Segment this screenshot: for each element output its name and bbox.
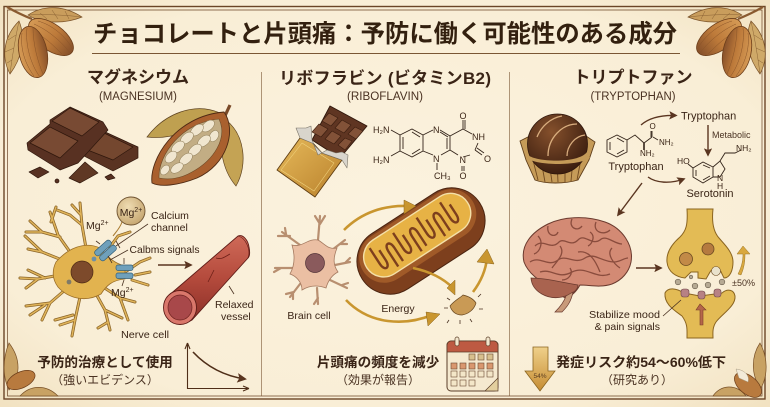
callout line: stabilize bbox=[663, 300, 681, 316]
icon: Mg2+ ion bbox=[113, 197, 145, 236]
label: stabilize: Stabilize mood bbox=[589, 309, 660, 321]
label: brain cell: Brain cell bbox=[287, 310, 331, 322]
chemical structure: riboflavin: H₂N bbox=[373, 155, 390, 165]
text: frequency reduction: 片頭痛の頻度を減少 bbox=[317, 354, 440, 370]
chemical structure: riboflavin: N bbox=[433, 154, 440, 164]
icon: chocolate pieces bbox=[27, 107, 138, 183]
text: preventive use bbox=[37, 354, 173, 387]
panel: magnesium bbox=[20, 67, 254, 391]
icon: down arrow 54%: 54% bbox=[533, 373, 547, 380]
icon: cocoa pod bbox=[147, 105, 243, 186]
chemical structure: riboflavin bbox=[373, 111, 491, 181]
divider lines bbox=[92, 54, 680, 396]
icon: down arrow 54% bbox=[525, 347, 555, 391]
chart: declining curve bbox=[185, 343, 249, 391]
chemical structure: tryptophan bbox=[607, 122, 674, 158]
chemical structure: serotonin bbox=[677, 143, 752, 191]
text: preventive use: （強いエビデンス） bbox=[51, 372, 159, 387]
icon: brain bbox=[523, 218, 631, 312]
text: risk reduction bbox=[556, 354, 726, 387]
heading: magnesium: マグネシウム bbox=[87, 67, 189, 87]
panel: riboflavin bbox=[274, 68, 498, 391]
icon: Mg2+ ion: 2+ bbox=[134, 207, 142, 214]
icon: nerve cell bbox=[20, 203, 150, 336]
icon: energy spark bbox=[444, 294, 483, 324]
chemical structure: riboflavin: O bbox=[460, 111, 467, 121]
label: tryptophan top: Tryptophan bbox=[681, 110, 736, 122]
icon: relaxed vessel bbox=[164, 236, 250, 324]
nerve cell labels: Mg bbox=[86, 220, 101, 232]
text: preventive use: 予防的治療として使用 bbox=[37, 354, 173, 370]
heading: tryptophan: (TRYPTOPHAN) bbox=[590, 91, 676, 103]
corner decoration: bottom-right cocoa bbox=[713, 343, 766, 402]
heading: riboflavin: (RIBOFLAVIN) bbox=[347, 91, 423, 103]
chemical structure: serotonin: N bbox=[717, 173, 723, 183]
heading: magnesium bbox=[87, 67, 189, 103]
icon: synapse bbox=[665, 209, 735, 338]
chemical structure: riboflavin: CH₃ bbox=[434, 171, 451, 181]
chemical structure: tryptophan: NH₂ bbox=[640, 149, 655, 158]
chemical structure: riboflavin: NH bbox=[472, 132, 485, 142]
icon: chocolate truffle bbox=[520, 114, 595, 183]
nerve cell labels: Nerve cell bbox=[121, 329, 169, 341]
label: tryptophan: Tryptophan bbox=[608, 161, 664, 173]
corner decoration: bottom-left cocoa bbox=[4, 343, 58, 396]
chemical structure: serotonin: HO bbox=[677, 156, 690, 166]
text: frequency reduction bbox=[317, 354, 440, 387]
icon: calendar bbox=[447, 337, 498, 391]
text: risk reduction: 発症リスク約54〜60%低下 bbox=[556, 354, 726, 370]
label: plus minus 50%: ±50% bbox=[732, 278, 755, 288]
heading: riboflavin bbox=[279, 68, 491, 103]
chemical structure: riboflavin: N bbox=[433, 125, 440, 135]
corner decoration: top-left cocoa pods bbox=[5, 7, 82, 80]
title: チョコレートと片頭痛：予防に働く可能性のある成分 bbox=[93, 20, 677, 48]
icon: chocolate bar bbox=[277, 106, 367, 197]
nerve cell labels: Calcium bbox=[151, 210, 189, 222]
text: risk reduction: （研究あり） bbox=[601, 373, 673, 387]
label: stabilize: & pain signals bbox=[595, 321, 660, 333]
chemical structure: serotonin: H bbox=[717, 181, 723, 191]
heading: tryptophan bbox=[574, 68, 692, 103]
icon: mitochondrion bbox=[344, 175, 498, 307]
nerve cell labels: Calbms signals bbox=[130, 244, 200, 256]
arrow: synapse up bbox=[737, 246, 750, 275]
arrow: nerve to vessel bbox=[158, 264, 191, 266]
chemical structure: serotonin: NH₂ bbox=[736, 143, 752, 153]
arrows: pathway bbox=[618, 115, 708, 268]
nerve cell labels: 2+ bbox=[126, 287, 134, 294]
nerve cell labels: 2+ bbox=[101, 220, 109, 227]
callout lines: nerve cell bbox=[96, 224, 234, 294]
label: serotonin: Serotonin bbox=[686, 188, 734, 200]
nerve cell labels: Mg bbox=[111, 287, 126, 299]
label: metabolic: Metabolic bbox=[712, 130, 751, 140]
chemical structure: riboflavin: H₂N bbox=[373, 125, 390, 135]
heading: tryptophan: トリプトファン bbox=[574, 68, 692, 87]
chemical structure: tryptophan: NH₂ bbox=[659, 138, 674, 147]
heading: magnesium: (MAGNESIUM) bbox=[99, 91, 177, 103]
chemical structure: riboflavin: O bbox=[460, 171, 467, 181]
nerve cell labels: channel bbox=[151, 222, 188, 234]
chemical structure: riboflavin: N bbox=[460, 155, 466, 165]
heading: riboflavin: リボフラビン (ビタミンB2) bbox=[279, 68, 491, 88]
arrows: energy flow bbox=[344, 206, 487, 322]
label: energy: Energy bbox=[381, 303, 415, 315]
icon: brain cell bbox=[274, 216, 350, 304]
text: frequency reduction: （効果が報告） bbox=[336, 372, 420, 387]
panel: tryptophan bbox=[520, 68, 755, 391]
corner decoration: top-right cocoa pods bbox=[688, 7, 765, 80]
nerve cell labels bbox=[86, 210, 254, 341]
nerve cell labels: Relaxed bbox=[215, 299, 254, 311]
chemical structure: tryptophan: O bbox=[650, 122, 656, 131]
icon: Mg2+ ion: Mg bbox=[120, 207, 134, 219]
chemical structure: riboflavin: O bbox=[484, 154, 491, 164]
label: stabilize bbox=[589, 309, 660, 333]
nerve cell labels: vessel bbox=[221, 311, 251, 323]
